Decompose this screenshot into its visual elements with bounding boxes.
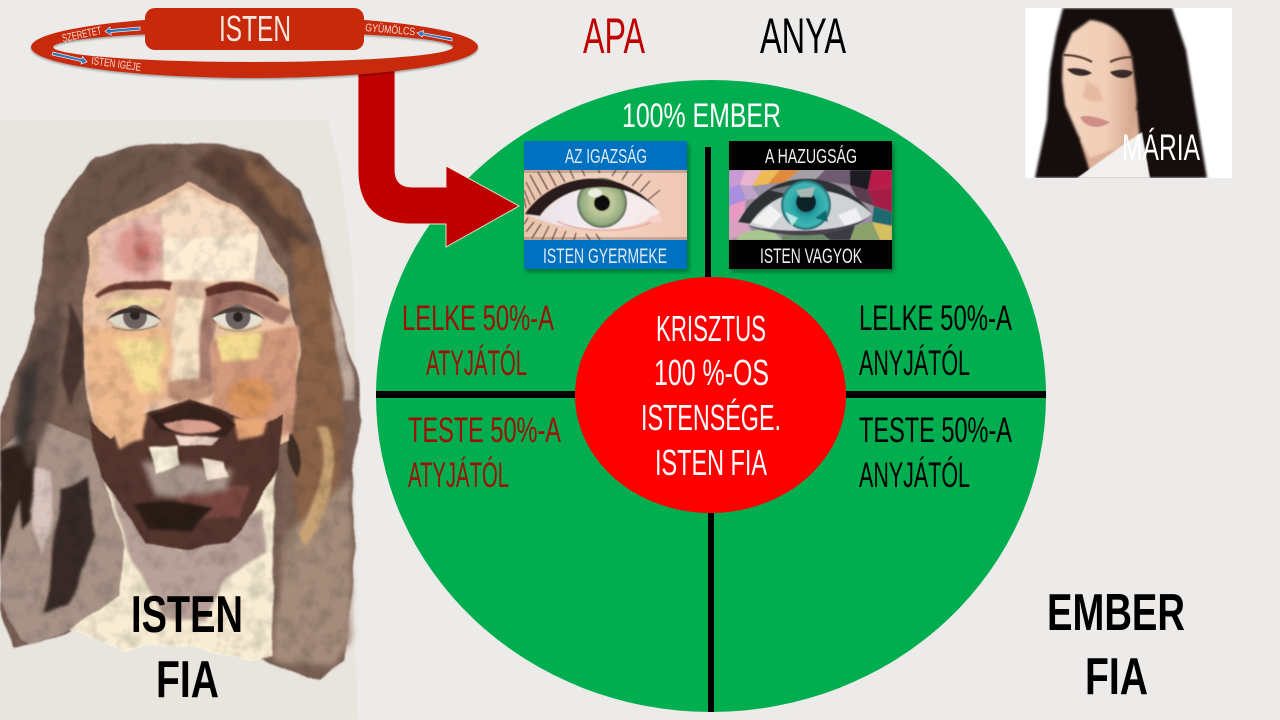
heading: mother: ANYA [760, 8, 846, 64]
label: MÁRIA [1122, 127, 1200, 168]
arrow: love [105, 27, 140, 35]
text block: soul from the father: LELKE 50%-A [402, 299, 554, 338]
label: fruit: GYÜMÖLCS [365, 22, 416, 38]
heading: 100% ember: 100% EMBER [622, 97, 781, 135]
text block: body from the mother [859, 411, 1012, 495]
arrow: fruit [417, 30, 452, 41]
shirt [1077, 132, 1150, 178]
card footer: ISTEN VAGYOK [760, 245, 862, 268]
card: the lie [729, 141, 892, 269]
label: love: SZERETET [61, 25, 103, 45]
center text: ISTENSÉGE. [641, 397, 781, 438]
center text: KRISZTUS [656, 308, 766, 349]
text block: body from the mother: TESTE 50%-A [859, 411, 1012, 450]
eyebrows [1063, 55, 1133, 62]
arrow: word of God [52, 52, 87, 64]
right eye [211, 304, 265, 331]
label: Son of God: FIA [156, 651, 219, 709]
red center: Christ's divinity [575, 277, 846, 513]
face [1062, 20, 1137, 158]
card header: A HAZUGSÁG [765, 145, 857, 168]
God banner [145, 8, 364, 50]
photo: Mary [1025, 8, 1232, 178]
hair [1035, 8, 1207, 178]
text block: body from the mother: ANYJÁTÓL [859, 456, 970, 495]
center text: ISTEN FIA [655, 442, 767, 483]
text block: soul from the mother: ANYJÁTÓL [859, 344, 970, 383]
text block: body from the father [408, 411, 561, 495]
card footer: ISTEN GYERMEKE [543, 245, 667, 268]
text block: soul from the father: ATYJÁTÓL [426, 344, 527, 383]
text block: body from the father: ATYJÁTÓL [408, 456, 509, 495]
lips [1080, 116, 1110, 127]
eyes [1067, 68, 1133, 78]
label: word of God: ISTEN IGÉJE [91, 54, 142, 74]
ring: God cycle [31, 8, 478, 78]
eye photo: mosaic eye [729, 170, 892, 240]
center text: 100 %-OS [654, 352, 769, 393]
left eye [106, 305, 162, 330]
divider lines [376, 147, 1046, 712]
card: the truth [524, 141, 687, 269]
text block: soul from the father [402, 299, 554, 383]
illustration: watercolor portrait of Jesus [0, 120, 370, 720]
text block: soul from the mother: LELKE 50%-A [859, 299, 1012, 338]
label: Son of Man: FIA [1085, 648, 1148, 706]
green circle: 100% human [376, 80, 1046, 712]
card header: AZ IGAZSÁG [565, 145, 647, 168]
eye photo: green eye [524, 170, 687, 240]
label: Son of Man [1047, 584, 1185, 706]
God label: ISTEN [219, 8, 291, 49]
arrow: from God to the truth [358, 60, 519, 247]
neck [1080, 110, 1140, 172]
label: Son of God: ISTEN [131, 586, 243, 644]
text block: soul from the mother [859, 299, 1012, 383]
label: Son of God [131, 586, 243, 709]
heading: father: APA [583, 8, 645, 64]
text block: body from the father: TESTE 50%-A [408, 411, 561, 450]
label: Son of Man: EMBER [1047, 584, 1185, 642]
nose [1083, 80, 1103, 101]
center text [641, 308, 781, 483]
